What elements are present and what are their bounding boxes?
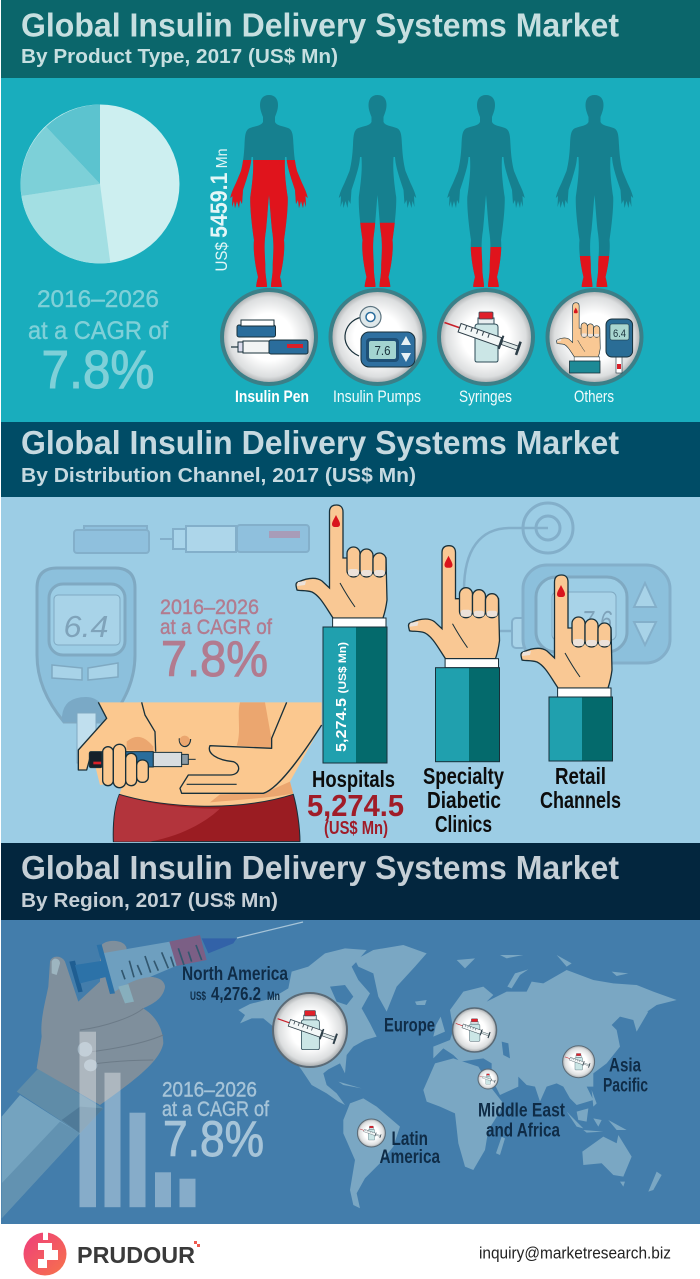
CAGR callout: 2016–2026	[162, 1079, 257, 1102]
body figure: others	[556, 95, 633, 287]
vertical bar value: 5,274.5 (US$ Mn)	[333, 642, 350, 752]
logo mark	[24, 1232, 66, 1276]
icon: finger prick and glucose meter: 6.4	[613, 328, 626, 340]
icon: faded insulin pump: 7.6	[582, 605, 612, 636]
holding arm	[78, 702, 156, 785]
label: latin america	[380, 1129, 440, 1168]
CAGR callout	[28, 286, 168, 400]
CAGR callout: at a CAGR of	[28, 317, 168, 345]
CAGR callout: at a CAGR of	[162, 1098, 269, 1121]
hand bar: hospitals	[296, 505, 387, 763]
CAGR callout	[162, 1079, 269, 1167]
label: asia pacific	[603, 1056, 648, 1097]
label: specialty diabetic clinics: Diabetic	[427, 787, 501, 813]
label: middle east and africa: Middle East	[478, 1101, 566, 1122]
header: region	[1, 843, 700, 920]
bar chart	[80, 1032, 196, 1207]
label: latin america: America	[380, 1147, 440, 1168]
CAGR callout: 7.8%	[42, 340, 154, 400]
label: middle east and africa	[478, 1101, 566, 1142]
label: retail channels	[540, 763, 621, 813]
label: north america	[182, 964, 288, 1004]
icon: insulin pen	[222, 290, 316, 384]
illustration: hand holding syringe	[2, 935, 237, 1218]
label: hospitals	[307, 766, 404, 838]
header: distribution channel	[1, 422, 700, 497]
label: retail channels: Channels	[540, 787, 621, 813]
illustration: injecting into abdomen	[78, 702, 322, 842]
hand bar: specialty clinics	[408, 546, 500, 762]
panel: region	[1, 920, 700, 1224]
footer	[0, 1224, 700, 1279]
panel: distribution channel	[1, 497, 700, 843]
label: middle east and africa: and Africa	[486, 1121, 560, 1142]
syringe	[69, 961, 83, 992]
header: region: Global Insulin Delivery Systems Market	[21, 849, 619, 886]
label: north america: US$	[190, 989, 206, 1003]
logo dots	[194, 1241, 200, 1247]
cuff	[17, 1068, 103, 1133]
thumb	[115, 977, 165, 1006]
label: hospitals: Hospitals	[312, 766, 395, 792]
label: latin america: Latin	[392, 1129, 428, 1150]
torso	[119, 702, 322, 806]
label: asia pacific: Asia	[609, 1056, 641, 1077]
navel	[179, 738, 191, 747]
marker: north america	[273, 993, 347, 1067]
panel: product type	[1, 78, 700, 422]
world map	[238, 945, 677, 1208]
CAGR callout	[160, 596, 272, 687]
label: others: Others	[574, 388, 614, 406]
pants	[113, 794, 300, 842]
label: specialty diabetic clinics	[423, 763, 504, 837]
marker: asia pacific	[563, 1046, 595, 1078]
body figure: insulin pen	[230, 95, 308, 287]
CAGR callout: 7.8%	[161, 631, 268, 687]
icon: faded glucose meter	[37, 568, 135, 763]
icon: insulin pump	[330, 290, 424, 384]
label: north america: North America	[182, 964, 288, 985]
icon: finger prick and glucose meter	[548, 290, 642, 384]
icon: faded pen	[160, 525, 309, 552]
icon: insulin pump: 7.6	[374, 343, 390, 358]
icon: faded insulin pump	[464, 503, 670, 663]
torso side line	[180, 702, 322, 793]
vertical value label: US$ 5459.1 Mn	[206, 148, 233, 272]
label: insulin pen: Insulin Pen	[235, 388, 309, 406]
body figure: syringes	[447, 95, 525, 287]
label: europe: Europe	[384, 1016, 435, 1037]
header: product type	[1, 0, 700, 78]
label: hospitals: (US$ Mn)	[324, 818, 388, 838]
syringe needle	[237, 922, 303, 938]
CAGR callout: 7.8%	[163, 1111, 264, 1167]
CAGR callout: at a CAGR of	[160, 616, 272, 639]
header: distribution channel: Global Insulin Delivery Systems Market	[21, 424, 619, 461]
insulin pen	[89, 752, 102, 768]
label: insulin pumps: Insulin Pumps	[333, 388, 421, 406]
skin shading	[210, 702, 293, 802]
sleeve	[2, 1095, 80, 1218]
hand bar: retail channels	[521, 575, 612, 761]
header: distribution channel: By Distribution Channel, 2017 (US$ Mn)	[21, 465, 416, 487]
fingertips	[78, 1042, 92, 1057]
CAGR callout: 2016–2026	[160, 596, 259, 619]
label: specialty diabetic clinics: Clinics	[435, 811, 492, 837]
pie chart	[20, 104, 180, 264]
label: retail channels: Retail	[555, 763, 606, 789]
marker: europe	[452, 1008, 496, 1052]
logo wordmark: PRUDOUR	[77, 1242, 195, 1268]
label: specialty diabetic clinics: Specialty	[423, 763, 504, 789]
header: region: By Region, 2017 (US$ Mn)	[21, 890, 278, 912]
CAGR callout: 2016–2026	[37, 286, 159, 313]
header: product type: Global Insulin Delivery Systems Market	[21, 7, 619, 44]
label: north america: 4,276.2	[211, 984, 261, 1004]
icon: faded glucose meter: 6.4	[64, 609, 108, 644]
icon: faded pen cap	[74, 526, 149, 553]
hand	[37, 941, 165, 1105]
header: product type: By Product Type, 2017 (US$ Mn)	[21, 46, 338, 68]
label: asia pacific: Pacific	[603, 1076, 648, 1097]
label: hospitals: 5,274.5	[307, 788, 404, 823]
icon: syringe and vial	[439, 290, 533, 384]
contact email: inquiry@marketresearch.biz	[479, 1244, 671, 1262]
marker: middle east and africa	[478, 1069, 498, 1089]
label: syringes: Syringes	[459, 388, 512, 406]
fingers	[103, 747, 113, 786]
marker: latin america	[357, 1119, 385, 1147]
label: north america: Mn	[267, 989, 280, 1003]
body figure: insulin pumps	[339, 95, 416, 287]
